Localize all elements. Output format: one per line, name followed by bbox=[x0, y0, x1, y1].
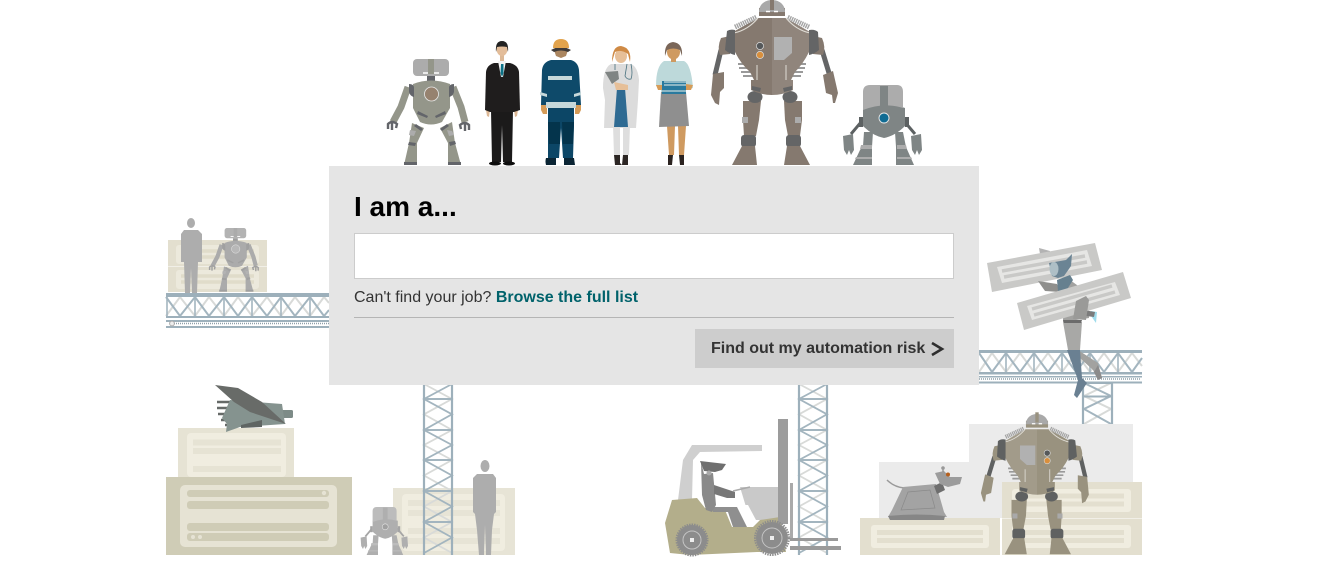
robot: carrying crates bbox=[987, 243, 1131, 398]
person: worker in hard hat bbox=[540, 39, 581, 165]
icon: forklift bbox=[665, 419, 841, 556]
icon: jet robot bbox=[215, 385, 293, 432]
robot: olive, top row bbox=[388, 59, 469, 165]
crates: behind small robot and person bbox=[393, 488, 515, 555]
crates: large stack left bbox=[166, 428, 352, 555]
search input bbox=[354, 233, 954, 279]
tower: short right bbox=[1083, 383, 1113, 425]
crates: upper left bbox=[168, 240, 267, 292]
silhouette: small robot bbox=[361, 507, 408, 555]
person: man in suit bbox=[485, 41, 520, 166]
backdrop: pale grey blocks bbox=[879, 424, 1133, 522]
robot: large brown bbox=[711, 0, 838, 165]
divider bbox=[354, 317, 954, 318]
person: woman with books bbox=[656, 42, 693, 165]
panel: job search form bbox=[329, 166, 979, 385]
tower: centre right bbox=[798, 384, 828, 555]
icon: robot dog bbox=[887, 466, 962, 520]
silhouette: robot on shelf bbox=[210, 228, 258, 292]
silhouette: person on shelf bbox=[181, 218, 202, 293]
person: doctor bbox=[603, 46, 639, 165]
shelf platform: right bbox=[979, 350, 1142, 384]
tower: left bbox=[423, 384, 453, 555]
robot: khaki large bbox=[981, 412, 1089, 554]
crates: lower right bbox=[860, 482, 1142, 555]
button label: Find out my automation risk bbox=[711, 340, 925, 357]
help text with link: Can't find your job? Browse the full list bbox=[354, 289, 638, 306]
shelf platform: upper left bbox=[166, 293, 329, 328]
icon: chevron bbox=[931, 342, 944, 356]
silhouette: person bbox=[473, 460, 496, 555]
heading: I am a... bbox=[354, 191, 457, 222]
button: find out risk bbox=[695, 329, 954, 368]
robot: small grey bbox=[843, 85, 922, 165]
